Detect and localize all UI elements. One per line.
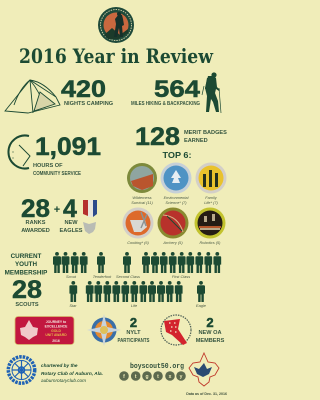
heading: top 6: TOP 6: (162, 150, 192, 160)
badge: robotics (194, 208, 226, 245)
badge: robotics: Robotics (5) (200, 240, 221, 245)
stat: new OA members: MEMBERS (196, 338, 225, 344)
logo: troop emblem (98, 7, 134, 43)
logo: BSA fleur-de-lis (189, 353, 219, 386)
stat: new eagles: 4 (63, 195, 77, 223)
stat: miles hiking: MILES HIKING & BACKPACKING (131, 101, 200, 107)
stat: new eagles: EAGLES (59, 228, 83, 234)
stat: new eagles: NEW (64, 220, 78, 226)
icon: hiker (202, 72, 221, 113)
award: journey to excellence (15, 316, 74, 344)
footnote: Data as of Dec. 31, 2016 (186, 392, 227, 396)
membership row 1 labels (66, 274, 190, 279)
badge: environmental science (160, 162, 192, 205)
award: journey to excellence: EXCELLENCE (45, 324, 68, 328)
logo: NYLT (87, 314, 121, 346)
stat: merit badges: MERIT BADGES (184, 130, 227, 136)
stat: ranks awarded (21, 195, 50, 234)
badge: cooking: Cooking* (6) (127, 240, 150, 245)
badge: archery: Archery (5) (162, 240, 183, 245)
stat: new OA members: NEW OA (198, 330, 222, 336)
badge: family life: Life* (7) (204, 200, 219, 205)
stat: nights camping: 420 (61, 76, 106, 103)
stat: NYLT participants: NYLT (126, 330, 141, 336)
award: journey to excellence: UNIT AWARD (45, 333, 67, 337)
stat: NYLT participants (118, 315, 150, 344)
social icons: x (169, 374, 172, 380)
membership row 1 labels: Tenderfoot (93, 274, 112, 279)
badge: wilderness survival (127, 163, 157, 205)
website: boyscout50.org (130, 363, 184, 371)
badge: cooking (122, 208, 154, 245)
badge: family life: Family (205, 195, 218, 200)
plus sign: + (54, 204, 60, 216)
stat: merit badges (135, 123, 227, 151)
membership row 2 labels: Star (69, 303, 77, 308)
stat: ranks awarded: 28 (21, 195, 50, 223)
stat: hours of community service: 1,091 (35, 133, 101, 161)
stat: miles hiking: 564 (154, 76, 201, 103)
text: chartered by: auburnrotaryclub.com (41, 378, 86, 383)
stat: hours of community service: COMMUNITY SERVICE (33, 171, 81, 177)
membership row 1 labels: Second Class (116, 274, 140, 279)
social icons (119, 371, 186, 381)
stat: hours of community service (33, 133, 101, 177)
heading: current youth membership: MEMBERSHIP (5, 270, 47, 276)
membership row 1 (53, 252, 221, 273)
stat: new eagles (59, 195, 83, 234)
background (0, 0, 232, 400)
award: journey to excellence: JOURNEY to (46, 320, 66, 324)
membership row 2 labels (69, 303, 207, 308)
stat: NYLT participants: PARTICIPANTS (118, 338, 150, 344)
badge: environmental science: Environmental (164, 195, 189, 200)
stat: merit badges: EARNED (184, 138, 208, 144)
membership row 2 labels: Life (131, 303, 138, 308)
text: chartered by (41, 363, 103, 383)
badge: environmental science: Science* (7) (165, 200, 187, 205)
award: journey to excellence: GOLD (51, 329, 61, 333)
icon: tent (5, 80, 60, 113)
heading: current youth membership: CURRENT (11, 253, 42, 260)
social icons: f (123, 374, 125, 380)
stat: hours of community service: HOURS OF (33, 163, 63, 169)
heading: current youth membership: YOUTH (15, 261, 37, 268)
membership row 1 labels: First Class (172, 274, 190, 279)
badge: wilderness survival: Wilderness (132, 195, 152, 200)
membership row 1 labels: Scout (66, 274, 77, 279)
stat: 28 scouts: 28 (12, 276, 42, 304)
stat: ranks awarded: RANKS (26, 220, 46, 226)
stat: nights camping: NIGHTS CAMPING (64, 101, 113, 107)
social icons: y (180, 374, 183, 380)
stat: new OA members (196, 315, 225, 344)
badge: archery (158, 208, 188, 245)
social icons: t (157, 374, 159, 380)
icon: clock (8, 136, 30, 169)
stat: nights camping (61, 76, 113, 107)
logo: order of the arrow lodge (161, 315, 191, 345)
text: chartered by: chartered by the (41, 363, 78, 368)
stat: new OA members: 2 (206, 315, 214, 330)
membership row 2 (69, 281, 205, 302)
social icons: t (135, 374, 137, 380)
membership row 2 labels: Eagle (196, 303, 207, 308)
text: chartered by: Rotary Club of Auburn, Ala. (41, 371, 103, 376)
icon: eagle medal (83, 200, 97, 234)
social icons: g (145, 374, 149, 380)
stat: NYLT participants: 2 (130, 315, 137, 330)
stat: ranks awarded: AWARDED (21, 228, 50, 234)
stat: miles hiking (131, 76, 201, 107)
heading: current youth membership (5, 253, 47, 276)
logo: rotary wheel (8, 357, 35, 383)
award: journey to excellence: 2016 (52, 339, 60, 343)
badge: family life (196, 162, 226, 205)
stat: 28 scouts: SCOUTS (15, 302, 39, 308)
stat: merit badges: 128 (135, 123, 180, 151)
badge: wilderness survival: Survival (11) (131, 200, 153, 205)
